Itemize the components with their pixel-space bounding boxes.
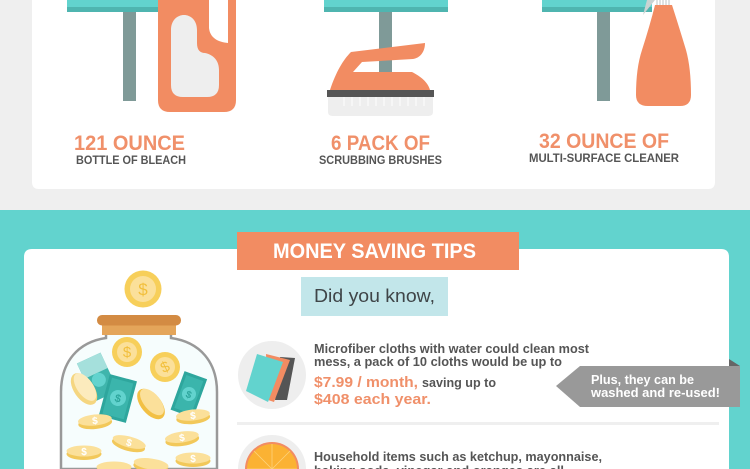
illustration: money jar: $ (123, 344, 132, 361)
label: 6 pack of: 6 PACK OF (331, 132, 430, 155)
illustration: money jar: $ (158, 358, 173, 377)
label: multi-surface cleaner: MULTI-SURFACE CLEANER (529, 151, 679, 165)
icon: flat coins: $ (179, 433, 186, 444)
icon: flat coins: $ (92, 416, 99, 427)
callout: washed and re-used (556, 359, 740, 407)
subheading: did you know (301, 277, 448, 316)
label: scrubbing brushes: SCRUBBING BRUSHES (319, 153, 442, 167)
label: bottle of bleach: BOTTLE OF BLEACH (76, 153, 186, 167)
panel: money saving tips (24, 232, 729, 469)
item: spray cleaner on shelf (542, 0, 691, 106)
tip text: microfiber cloths: Microfiber cloths with water could clean most (314, 342, 590, 356)
icon: flat coins: $ (125, 437, 133, 450)
icon: flat coins: $ (190, 454, 196, 465)
item: bleach bottle on shelf (67, 0, 236, 112)
callout: washed and re-used: Plus, they can be (591, 373, 694, 387)
callout: washed and re-used: washed and re-used! (590, 386, 720, 400)
tip text: microfiber cloths: mess, a pack of 10 cloths would be up to (314, 355, 562, 369)
tip text: microfiber cloths: $408 each year. (314, 391, 431, 408)
tip text: microfiber cloths: $7.99 / month, (314, 374, 418, 391)
illustration: money jar: $ (113, 392, 122, 406)
tip text: household items: Household items such as ketchup, mayonnaise, (314, 450, 602, 464)
icon: microfiber cloths (238, 341, 306, 409)
heading banner: MONEY SAVING TIPS (273, 240, 476, 263)
label: 121 ounce: 121 OUNCE (74, 132, 185, 155)
tip text: microfiber cloths (314, 342, 590, 408)
icon: orange slice (238, 435, 306, 469)
icon: falling coin (124, 270, 162, 308)
illustration: money jar (61, 270, 217, 469)
item: scrubbing brush on shelf (324, 0, 448, 116)
icon: flat coins (66, 408, 211, 469)
tip text: microfiber cloths: saving up to (422, 376, 496, 390)
label: 32 ounce of: 32 OUNCE OF (539, 130, 669, 153)
icon: falling coin: $ (138, 280, 148, 299)
illustration: money jar: $ (184, 389, 193, 402)
heading banner (237, 232, 519, 270)
subheading: did you know: Did you know, (314, 286, 435, 306)
icon: flat coins: $ (190, 411, 197, 422)
icon: flat coins: $ (81, 447, 87, 458)
panel: cleaning supplies (32, 0, 715, 189)
